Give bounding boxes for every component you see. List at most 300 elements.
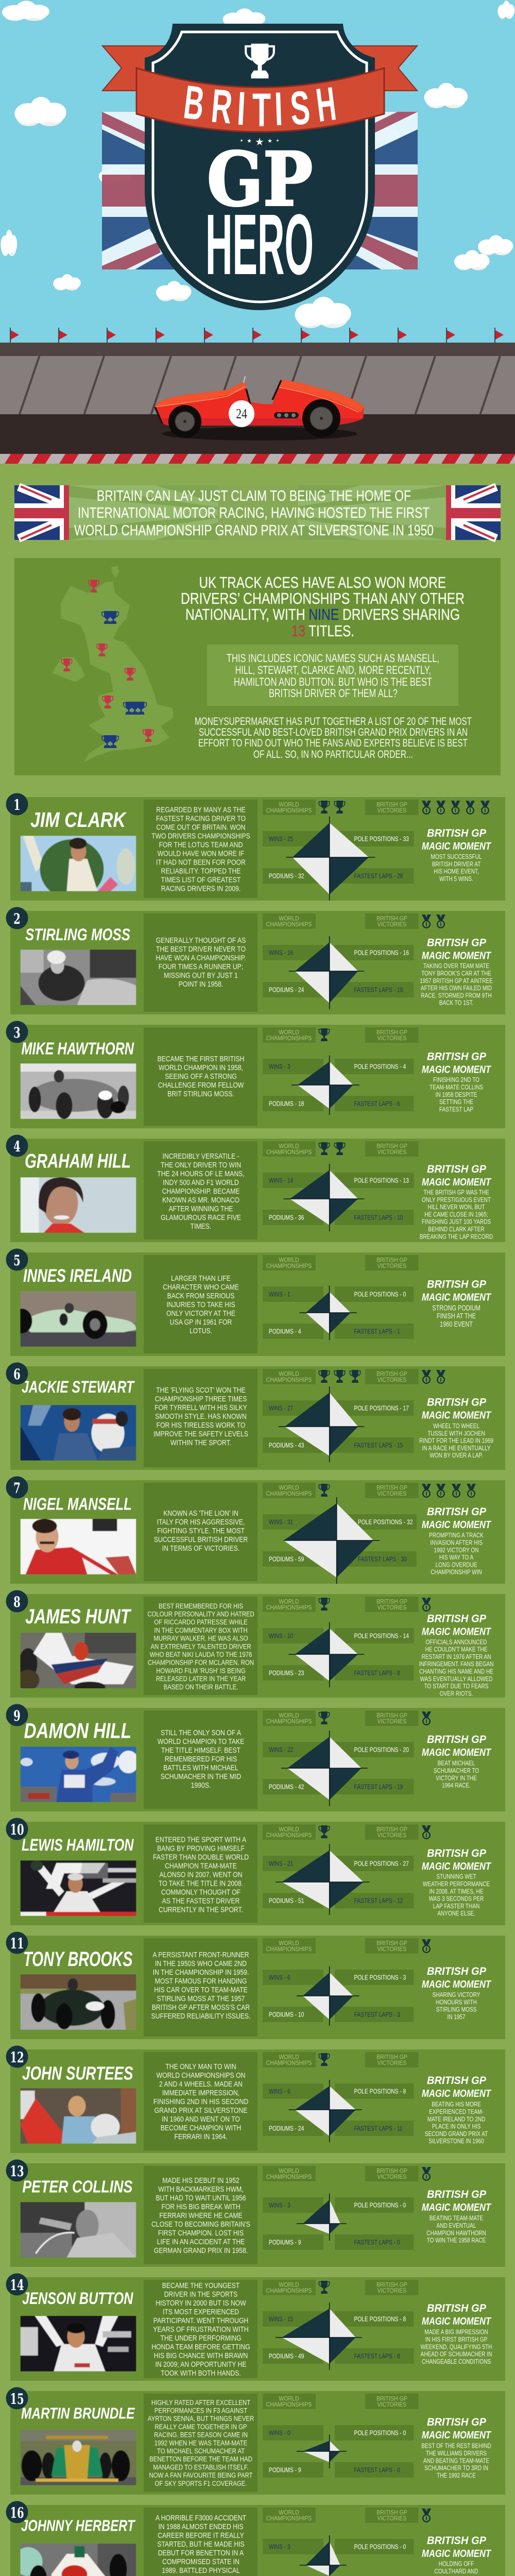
intro callout box: HAMILTON AND BUTTON. BUT WHO IS THE BEST: [234, 675, 432, 688]
panel: driver 12 John Surtees: IMMEDIATE IMPRESSION,: [162, 2089, 239, 2097]
panel: driver 1 Jim Clark: HIS HOME EVENT,: [434, 868, 479, 875]
panel: driver 8 James Hunt: 8: [13, 1593, 21, 1611]
panel: driver 11 Tony Brooks: FASTEST LAPS - 3: [354, 2012, 400, 2019]
panel: driver 11 Tony Brooks: A PERSISTANT FRONT-RUNNER: [152, 1951, 249, 1959]
panel: driver 11 Tony Brooks: POLE POSITIONS - 3: [354, 1975, 406, 1981]
panel: driver 14 Jenson Button: WEEKEND, QUALIFYING 5TH: [421, 2343, 492, 2351]
panel: driver 4 Graham Hill: CHAMPIONSHIP. BECAME: [162, 1187, 239, 1195]
panel: driver 2 Stirling Moss: WORLD: [279, 916, 299, 922]
panel: driver 11 Tony Brooks: PODIUMS - 10: [269, 2012, 304, 2019]
panel: driver 14 Jenson Button: MAGIC MOMENT: [422, 2316, 491, 2327]
panel: driver 14 Jenson Button: IN 2009; AN OPPORTUNITY HE: [155, 2360, 247, 2368]
panel: driver 6 Jackie Stewart: BRITISH GP: [427, 1396, 486, 1408]
panel: driver 14 Jenson Button: [6, 2273, 505, 2381]
panel: driver 1 Jim Clark: RACING DRIVERS IN 2009.: [161, 884, 241, 893]
panel: driver 2 Stirling Moss: WINS - 16: [269, 950, 293, 957]
panel: driver 16 Johnny Herbert: HOLDING OFF: [439, 2560, 474, 2568]
panel: driver 13 Peter Collins: BRITISH GP: [427, 2189, 486, 2200]
panel: driver 15 Martin Brundle: REALLY CAME TOGETHER IN GP: [154, 2423, 247, 2431]
panel: driver 14 Jenson Button: BECAME THE YOUNGEST: [162, 2281, 239, 2290]
panel: driver 12 John Surtees: THE ONLY MAN TO WIN: [165, 2062, 236, 2071]
panel: driver 11 Tony Brooks: SUFFERED RELIABILITY ISSUES.: [151, 2012, 250, 2020]
title: BRITISH: I: [236, 82, 247, 135]
UK map: [53, 566, 174, 762]
panel: driver 8 James Hunt: BEST REMEMBERED FOR HIS: [159, 1602, 243, 1610]
panel: driver 12 John Surtees: WORLD: [279, 2054, 299, 2061]
panel: driver 10 Lewis Hamilton: BRITISH GP: [427, 1848, 486, 1859]
panel: driver 1 Jim Clark: 1: [13, 796, 21, 814]
panel: driver 8 James Hunt: RELEASED LATER IN THE YEAR: [156, 1675, 246, 1683]
panel: driver 7 Nigel Mansell: NIGEL MANSELL: [23, 1495, 132, 1514]
panel: driver 11 Tony Brooks: STIRLING MOSS AT THE 1957: [157, 1994, 245, 2003]
panel: driver 6 Jackie Stewart: CHAMPIONSHIPS: [266, 1377, 312, 1383]
panel: driver 15 Martin Brundle: MARTIN BRUNDLE: [21, 2404, 135, 2422]
panel: driver 11 Tony Brooks: VICTORIES: [377, 1946, 407, 1953]
panel: driver 13 Peter Collins: WINS - 3: [269, 2202, 290, 2209]
shield badge: [145, 24, 375, 310]
panel: driver 7 Nigel Mansell: PROMPTING A TRACK: [429, 1532, 484, 1539]
panel: driver 1 Jim Clark: WITH 5 WINS.: [439, 875, 473, 883]
panel: driver 5 Innes Ireland: USA GP IN 1961 FOR: [170, 1318, 232, 1326]
panel: driver 9 Damon Hill: BRITISH GP: [376, 1713, 407, 1719]
panel: driver 10 Lewis Hamilton: COMMONLY THOUGHT OF: [161, 1888, 241, 1896]
panel: driver 2 Stirling Moss: POINT IN 1958.: [179, 980, 223, 988]
intro callout box: [207, 645, 458, 706]
panel: driver 13 Peter Collins: WORLD: [279, 2168, 299, 2175]
panel: driver 14 Jenson Button: MADE A BIG IMPRESSION: [424, 2328, 488, 2336]
panel: driver 10 Lewis Hamilton: STUNNING WET: [436, 1873, 476, 1880]
panel: driver 1 Jim Clark: POLE POSITIONS - 33: [354, 836, 409, 843]
panel: driver 16 Johnny Herbert: 1989. BATTLED PHYSICAL: [162, 2566, 240, 2574]
panel: driver 6 Jackie Stewart: VICTORIES: [377, 1377, 407, 1383]
panel: driver 14 Jenson Button: WINS - 15: [269, 2316, 293, 2323]
panel: driver 13 Peter Collins: [6, 2160, 505, 2267]
panel: driver 11 Tony Brooks: IN THE CHAMPIONSHIP IN 1959.: [153, 1968, 249, 1976]
panel: driver 4 Graham Hill: GRAHAM HILL: [25, 1150, 131, 1173]
panel: driver 13 Peter Collins: MAGIC MOMENT: [422, 2202, 491, 2213]
title: BRITISH: T: [252, 84, 271, 137]
panel: driver 8 James Hunt: BRITISH GP: [376, 1599, 407, 1605]
panel: driver 4 Graham Hill: FASTEST LAPS - 10: [354, 1215, 403, 1222]
panel: driver 1 Jim Clark: BRITISH GP: [427, 827, 486, 839]
panel: driver 3 Mike Hawthorn: VICTORIES: [377, 1035, 407, 1042]
panel: driver 2 Stirling Moss: TAKING OVER TEAM MATE: [423, 962, 489, 970]
panel: driver 1 Jim Clark: IT HAD NOT BEEN FOR POOR: [156, 858, 246, 867]
panel: driver 5 Innes Ireland: CHAMPIONSHIPS: [266, 1263, 312, 1269]
panel: driver 4 Graham Hill: INCREDIBLY VERSATILE -: [162, 1152, 239, 1160]
panel: driver 14 Jenson Button: THE UNDER PERFORMING: [160, 2334, 242, 2342]
text: HERO: [205, 197, 314, 293]
panel: driver 4 Graham Hill: [6, 1134, 505, 1242]
panel: driver 15 Martin Brundle: CHAMPIONSHIPS: [266, 2401, 312, 2408]
panel: driver 2 Stirling Moss: POLE POSITIONS - 16: [354, 950, 409, 957]
panel: driver 2 Stirling Moss: HAVE WON A CHAMPIONSHIP.: [156, 954, 246, 962]
panel: driver 9 Damon Hill: FASTEST LAPS - 19: [354, 1784, 403, 1791]
panel: driver 15 Martin Brundle: WINS - 0: [269, 2430, 290, 2437]
panel: driver 6 Jackie Stewart: FOR HIS TIRELESS WORK TO: [157, 1421, 245, 1429]
panel: driver 2 Stirling Moss: MISSING OUT BY JUST 1: [164, 971, 238, 979]
panel: driver 3 Mike Hawthorn: WINS - 3: [269, 1064, 290, 1071]
intro heading: 13 TITLES.: [291, 622, 354, 640]
panel: driver 10 Lewis Hamilton: CHAMPIONSHIPS: [266, 1832, 312, 1839]
panel: driver 11 Tony Brooks: CHAMPIONSHIPS: [266, 1946, 312, 1953]
panel: driver 6 Jackie Stewart: BRITISH GP: [376, 1371, 407, 1378]
panel: driver 14 Jenson Button: AHEAD OF SCHUMACHER IN: [421, 2350, 492, 2358]
panel: driver 13 Peter Collins: PETER COLLINS: [22, 2177, 132, 2197]
panel: driver 10 Lewis Hamilton: CURRENTLY IN THE SPORT.: [159, 1906, 243, 1914]
panel: driver 1 Jim Clark: VICTORIES: [377, 807, 407, 814]
panel: driver 10 Lewis Hamilton: POLE POSITIONS - 27: [354, 1861, 409, 1868]
panel: driver 10 Lewis Hamilton: TO TAKE THE TITLE IN 2008.: [159, 1879, 243, 1888]
panel: driver 5 Innes Ireland: 1960 EVENT: [440, 1319, 473, 1328]
panel: driver 8 James Hunt: CHANTING HIS NAME AND HE: [419, 1668, 493, 1675]
panel: driver 5 Innes Ireland: LOTUS.: [190, 1327, 212, 1335]
panel: driver 3 Mike Hawthorn: CHALLENGE FROM FELLOW: [158, 1081, 244, 1089]
panel: driver 7 Nigel Mansell: BRITISH GP: [427, 1506, 486, 1518]
panel: driver 8 James Hunt: CHAMPIONSHIP FOR MCLAREN. RON: [148, 1659, 254, 1667]
panel: driver 11 Tony Brooks: TONY BROOKS: [23, 1948, 133, 1971]
union flag behind the shield: [102, 112, 418, 269]
panel: driver 6 Jackie Stewart: PODIUMS - 43: [269, 1443, 304, 1449]
panel: driver 3 Mike Hawthorn: MAGIC MOMENT: [422, 1064, 491, 1075]
panel: driver 7 Nigel Mansell: 7: [13, 1479, 21, 1497]
panel: driver 15 Martin Brundle: THE 1992 RACE: [437, 2472, 476, 2479]
panel: driver 4 Graham Hill: 4: [13, 1138, 21, 1155]
panel: driver 6 Jackie Stewart: CHAMPIONSHIP THREE TIMES: [155, 1395, 247, 1403]
panel: driver 13 Peter Collins: CHAMPIONSHIPS: [266, 2174, 312, 2180]
panel: driver 12 John Surtees: BEATING HIS MORE: [432, 2100, 481, 2108]
panel: driver 1 Jim Clark: TIMES LIST OF GREATEST: [161, 875, 241, 884]
panel: driver 12 John Surtees: MATE IRELAND TO 2ND: [427, 2115, 485, 2123]
panel: driver 13 Peter Collins: FIRST CHAMPION. LOST HIS: [158, 2229, 244, 2237]
panel: driver 16 Johnny Herbert: BRITISH GP: [427, 2535, 486, 2547]
panel: driver 4 Graham Hill: POLE POSITIONS - 13: [354, 1178, 409, 1184]
panel: driver 9 Damon Hill: CHAMPIONSHIPS: [266, 1718, 312, 1725]
panel: driver 5 Innes Ireland: [6, 1249, 505, 1356]
panel: driver 3 Mike Hawthorn: POLE POSITIONS - 4: [354, 1064, 406, 1071]
panel: driver 12 John Surtees: MAGIC MOMENT: [422, 2088, 491, 2099]
panel: driver 6 Jackie Stewart: WHEEL TO WHEEL: [433, 1422, 479, 1430]
panel: driver 16 Johnny Herbert: 16: [10, 2504, 24, 2521]
panel: driver 5 Innes Ireland: BRITISH GP: [376, 1257, 407, 1264]
panel: driver 13 Peter Collins: TO WIN THE 1958 RACE: [427, 2236, 486, 2244]
panel: driver 10 Lewis Hamilton: LEWIS HAMILTON: [22, 1836, 134, 1854]
panel: driver 7 Nigel Mansell: WORLD: [279, 1485, 299, 1492]
panel: driver 9 Damon Hill: SCHUMACHER IN THE MID: [161, 1772, 241, 1781]
panel: driver 9 Damon Hill: POLE POSITIONS - 20: [354, 1747, 409, 1754]
panel: driver 11 Tony Brooks: BRITISH GP: [376, 1940, 407, 1947]
panel: driver 14 Jenson Button: TOOK WITH BOTH HANDS.: [161, 2369, 241, 2377]
panel: driver 9 Damon Hill: 1994 RACE.: [442, 1782, 471, 1789]
panel: driver 1 Jim Clark: RELIABILITY. TOPPED THE: [161, 867, 241, 875]
panel: driver 13 Peter Collins: FOR HIS BIG BREAK WITH: [161, 2202, 241, 2211]
panel: driver 14 Jenson Button: CHAMPIONSHIPS: [266, 2287, 312, 2294]
panel: driver 11 Tony Brooks: BRITISH GP AFTER MOSS'S CAR: [152, 2003, 250, 2011]
panel: driver 16 Johnny Herbert: DEBUT FOR BENETTON IN A: [158, 2549, 244, 2557]
panel: driver 6 Jackie Stewart: MAGIC MOMENT: [422, 1410, 491, 1421]
panel: driver 8 James Hunt: PODIUMS - 23: [269, 1670, 304, 1677]
panel: driver 11 Tony Brooks: HONOURS WITH: [436, 1998, 477, 2006]
panel: driver 3 Mike Hawthorn: FASTEST LAPS - 6: [354, 1101, 400, 1108]
panel: driver 2 Stirling Moss: BRITISH GP: [376, 916, 407, 922]
race car: [155, 376, 364, 440]
panel: driver 11 Tony Brooks: MOST FAMOUS FOR HANDING: [155, 1977, 247, 1985]
panel: driver 5 Innes Ireland: CHARACTER WHO CAME: [163, 1283, 239, 1291]
panel: driver 14 Jenson Button: FASTEST LAPS - 8: [354, 2353, 400, 2360]
panel: driver 13 Peter Collins: FERRARI WHERE HE CAME: [159, 2211, 243, 2219]
panel: driver 15 Martin Brundle: AND BEATING TEAM-MATE: [423, 2457, 489, 2465]
panel: driver 10 Lewis Hamilton: CHAMPION TEAM-MATE: [165, 1862, 237, 1870]
panel: driver 9 Damon Hill: WORLD CHAMPION TO TAKE: [158, 1737, 244, 1745]
panel: driver 2 Stirling Moss: 2: [13, 910, 21, 927]
panel: driver 14 Jenson Button: PODIUMS - 49: [269, 2353, 304, 2360]
panel: driver 4 Graham Hill: TIMES.: [191, 1222, 211, 1230]
panel: driver 6 Jackie Stewart: 6: [13, 1365, 21, 1383]
panel: driver 7 Nigel Mansell: [6, 1477, 505, 1584]
panel: driver 11 Tony Brooks: BRITISH GP: [427, 1965, 486, 1977]
panel: driver 2 Stirling Moss: 1957 BRITISH GP AT AINTREE: [420, 977, 493, 985]
panel: driver 4 Graham Hill: MAGIC MOMENT: [422, 1177, 491, 1188]
panel: driver 13 Peter Collins: POLE POSITIONS - 0: [354, 2202, 406, 2209]
panel: driver 15 Martin Brundle: HIGHLY RATED AFTER EXCELLENT: [151, 2399, 250, 2406]
panel: driver 16 Johnny Herbert: COULTHARD AND: [434, 2568, 478, 2575]
panel: driver 14 Jenson Button: BRITISH GP: [376, 2282, 407, 2289]
panel: driver 15 Martin Brundle: SCHUMACHER TO 3RD IN: [424, 2464, 488, 2472]
panel: driver 7 Nigel Mansell: MAGIC MOMENT: [422, 1519, 491, 1531]
title: BRITISH: H: [313, 77, 339, 132]
panel: driver 6 Jackie Stewart: RINDT FOR THE LEAD IN 1969: [419, 1437, 493, 1445]
panel: driver 6 Jackie Stewart: WON BY OVER A LAP.: [430, 1452, 483, 1460]
panel: driver 4 Graham Hill: KNOWN AS MR. MONACO: [162, 1196, 239, 1204]
intro heading: UK TRACK ACES HAVE ALSO WON MORE: [199, 573, 446, 591]
panel: driver 5 Innes Ireland: PODIUMS - 4: [269, 1329, 301, 1335]
panel: driver 2 Stirling Moss: VICTORIES: [377, 921, 407, 928]
panel: driver 1 Jim Clark: REGARDED BY MANY AS THE: [156, 805, 246, 814]
panel: driver 4 Graham Hill: GLAMOUROUS RACE FIVE: [161, 1213, 241, 1222]
panel: driver 4 Graham Hill: AFTER WINNING THE: [168, 1205, 233, 1213]
panel: driver 8 James Hunt: AN EXTREMELY TALENTED DRIVER: [150, 1642, 251, 1651]
panel: driver 4 Graham Hill: CHAMPIONSHIPS: [266, 1149, 312, 1156]
panel: driver 14 Jenson Button: YEARS OF FRUSTRATION WITH: [153, 2325, 249, 2333]
panel: driver 4 Graham Hill: THE BRITISH GP WAS THE: [423, 1189, 489, 1196]
panel: driver 3 Mike Hawthorn: WORLD CHAMPION IN 1958,: [159, 1063, 243, 1072]
panel: driver 2 Stirling Moss: MAGIC MOMENT: [422, 950, 491, 961]
panel: driver 6 Jackie Stewart: WINS - 27: [269, 1405, 293, 1412]
panel: driver 5 Innes Ireland: FASTEST LAPS - 1: [354, 1329, 400, 1335]
panel: driver 8 James Hunt: [6, 1590, 505, 1698]
panel: driver 12 John Surtees: SILVERSTONE IN 1960: [428, 2138, 484, 2145]
panel: driver 3 Mike Hawthorn: BRIT STIRLING MOSS.: [167, 1090, 234, 1098]
panel: driver 15 Martin Brundle: AYRTON SENNA, BUT THINGS NEVER: [148, 2415, 254, 2422]
panel: driver 14 Jenson Button: WORLD: [279, 2282, 299, 2289]
panel: driver 16 Johnny Herbert: A HORRIBLE F3000 ACCIDENT: [156, 2514, 246, 2522]
panel: driver 6 Jackie Stewart: SMOOTH STYLE. HAS KNOWN: [155, 1412, 247, 1420]
panel: driver 2 Stirling Moss: BRITISH GP: [427, 937, 486, 949]
panel: driver 15 Martin Brundle: [6, 2387, 505, 2495]
panel: driver 8 James Hunt: BASED ON THEIR BATTLE.: [164, 1683, 238, 1691]
panel: driver 4 Graham Hill: FINISHING JUST 100 YARDS: [422, 1218, 491, 1226]
panel: driver 10 Lewis Hamilton: BANG BY PROVING HIMSELF: [157, 1844, 245, 1853]
panel: driver 9 Damon Hill: [6, 1704, 505, 1811]
panel: driver 5 Innes Ireland: STRONG PODIUM: [432, 1303, 480, 1312]
panel: driver 7 Nigel Mansell: FIGHTING STYLE. THE MOST: [157, 1527, 245, 1535]
panel: driver 14 Jenson Button: HIS BIG CHANCE WITH BRAWN: [154, 2351, 248, 2360]
panel: driver 4 Graham Hill: BREAKING THE LAP RECORD: [420, 1233, 493, 1241]
map trophies: [61, 580, 153, 748]
panel: driver 14 Jenson Button: ITS MOST EXPERIENCED: [163, 2308, 239, 2316]
panel: driver 16 Johnny Herbert: MAGIC MOMENT: [422, 2548, 491, 2560]
ribbon front: [136, 68, 384, 132]
panel: driver 12 John Surtees: WORLD CHAMPIONSHIPS ON: [157, 2071, 245, 2079]
panel: driver 2 Stirling Moss: THE BEST DRIVER NEVER TO: [156, 945, 246, 953]
panel: driver 4 Graham Hill: HE CAME CLOSE IN 1965;: [424, 1211, 488, 1218]
panel: driver 12 John Surtees: FINISHING 2ND IN HIS SECOND: [153, 2097, 248, 2106]
race car: 24: [236, 406, 247, 422]
sky: [0, 0, 515, 343]
panel: driver 3 Mike Hawthorn: PODIUMS - 18: [269, 1101, 304, 1108]
panel: driver 12 John Surtees: BRITISH GP: [427, 2075, 486, 2087]
panel: driver 15 Martin Brundle: WORLD: [279, 2396, 299, 2402]
panel: driver 9 Damon Hill: WORLD: [279, 1713, 299, 1719]
panel: driver 12 John Surtees: PODIUMS - 24: [269, 2126, 304, 2132]
panel: driver 9 Damon Hill: THE TITLE HIMSELF. BEST: [161, 1746, 241, 1754]
panel: driver 7 Nigel Mansell: FASTEST LAPS - 30: [358, 1556, 407, 1563]
panel: driver 8 James Hunt: OF RICCARDO PATRESSE WHILE: [154, 1618, 248, 1626]
panel: driver 12 John Surtees: EXPERIENCED TEAM-: [429, 2108, 484, 2115]
panel: driver 13 Peter Collins: AND EVENTUAL: [437, 2222, 476, 2229]
panel: driver 15 Martin Brundle: TO MICHAEL SCHUMACHER AT: [157, 2447, 245, 2455]
panel: driver 5 Innes Ireland: ONLY VICTORY AT THE: [166, 1309, 235, 1317]
panel: driver 1 Jim Clark: BRITISH GP: [376, 802, 407, 808]
panel: driver 7 Nigel Mansell: INVASION AFTER HIS: [430, 1539, 483, 1547]
panel: driver 3 Mike Hawthorn: CHAMPIONSHIPS: [266, 1035, 312, 1042]
panel: driver 16 Johnny Herbert: JOHNNY HERBERT: [21, 2517, 136, 2535]
panel: intro: [14, 558, 501, 775]
panel: driver 5 Innes Ireland: FINISH AT THE: [437, 1312, 476, 1320]
panel: driver 12 John Surtees: WINS - 6: [269, 2089, 290, 2095]
panel: driver 3 Mike Hawthorn: SETTING THE: [439, 1098, 473, 1106]
panel: driver 1 Jim Clark: PODIUMS - 32: [269, 873, 304, 880]
intro callout box: THIS INCLUDES ICONIC NAMES SUCH AS MANSELL,: [227, 652, 439, 665]
panel: driver 15 Martin Brundle: MAGIC MOMENT: [422, 2430, 491, 2441]
panel: driver 2 Stirling Moss: FOUR TIMES A RUNNER UP;: [159, 962, 243, 971]
panel: driver 12 John Surtees: FERRARI IN 1964.: [174, 2132, 228, 2141]
panel: driver 15 Martin Brundle: PERFORMANCES IN F3 AGAINST: [154, 2407, 247, 2415]
stars: ★: [240, 139, 243, 143]
panel: driver 3 Mike Hawthorn: SEEING OFF A STRONG: [165, 1072, 237, 1080]
panel: driver 2 Stirling Moss: RACE. STORMED FROM 9TH: [421, 992, 492, 999]
panel: driver 9 Damon Hill: MAGIC MOMENT: [422, 1747, 491, 1758]
title: BRITISH: B: [181, 75, 207, 130]
panel: driver 13 Peter Collins: VICTORIES: [377, 2174, 407, 2180]
panel: driver 5 Innes Ireland: INJURIES TO TAKE HIS: [166, 1300, 235, 1309]
panel: driver 2 Stirling Moss: FASTEST LAPS - 19: [354, 987, 403, 994]
panel: driver 16 Johnny Herbert: COMPROMISED STATE IN: [162, 2557, 239, 2566]
panel: driver 14 Jenson Button: BRITISH GP: [427, 2302, 486, 2314]
panel: driver 12 John Surtees: JOHN SURTEES: [22, 2063, 133, 2083]
panel: driver 13 Peter Collins: CLOSE TO BECOMING BRITAIN'S: [151, 2220, 250, 2228]
panel: driver 8 James Hunt: HOWARD FILM 'RUSH' IS BEING: [156, 1667, 246, 1675]
panel: driver 5 Innes Ireland: 5: [13, 1251, 21, 1269]
intro callout box: BRITISH DRIVER OF THEM ALL?: [269, 687, 398, 700]
panel: driver 4 Graham Hill: BRITISH GP: [427, 1163, 486, 1175]
panel: driver 16 Johnny Herbert: WINS - 3: [269, 2544, 290, 2551]
panel: driver 11 Tony Brooks: IN THE 1950S WHO CAME 2ND: [155, 1959, 247, 1968]
panel: driver 16 Johnny Herbert: CHAMPIONSHIPS: [266, 2515, 312, 2522]
panel: driver 10 Lewis Hamilton: AS THE FASTEST DRIVER: [162, 1897, 240, 1905]
panel: driver 4 Graham Hill: WORLD: [279, 1143, 299, 1150]
panel: driver 9 Damon Hill: STILL THE ONLY SON OF A: [161, 1728, 241, 1737]
panel: driver 11 Tony Brooks: WINS - 6: [269, 1975, 290, 1981]
panel: driver 13 Peter Collins: WITH BACKMARKERS HWM,: [158, 2185, 244, 2193]
panel: driver 12 John Surtees: [6, 2045, 505, 2153]
panel: driver 8 James Hunt: WHO BEAT NIKI LAUDA TO THE 1976: [150, 1651, 252, 1658]
panel: driver 7 Nigel Mansell: SUCCESSFUL BRITISH DRIVER: [154, 1535, 248, 1544]
panel: driver 1 Jim Clark: TWO DRIVERS CHAMPIONSHIPS: [151, 832, 250, 840]
panel: driver 15 Martin Brundle: MANAGED TO ESTABLISH ITSELF.: [153, 2463, 249, 2471]
panel: driver 10 Lewis Hamilton: WORLD: [279, 1826, 299, 1833]
panel: driver 13 Peter Collins: BUT HAD TO WAIT UNTIL 1956: [156, 2194, 246, 2202]
panel: driver 5 Innes Ireland: WINS - 1: [269, 1292, 290, 1298]
panel: driver 4 Graham Hill: THE ONLY DRIVER TO WIN: [161, 1161, 241, 1169]
panel: driver 5 Innes Ireland: MAGIC MOMENT: [422, 1292, 491, 1303]
panel: driver 8 James Hunt: TO START DUE TO FEARS: [424, 1683, 489, 1690]
panel: driver 9 Damon Hill: REMEMBERED FOR HIS: [165, 1755, 237, 1763]
panel: driver 3 Mike Hawthorn: BRITISH GP: [376, 1029, 407, 1036]
panel: driver 10 Lewis Hamilton: FASTER THAN DOUBLE WORLD: [153, 1853, 249, 1861]
panel: driver 16 Johnny Herbert: CAREER BEFORE IT REALLY: [158, 2531, 244, 2539]
panel: driver 4 Graham Hill: BRITISH GP: [376, 1143, 407, 1150]
panel: driver 13 Peter Collins: PODIUMS - 9: [269, 2240, 301, 2246]
panel: driver 8 James Hunt: MURRAY WALKER. HE WAS ALSO: [153, 1635, 248, 1642]
panel: driver 8 James Hunt: WAS EVENTUALLY ALLOWED: [420, 1675, 492, 1683]
panel: driver 9 Damon Hill: SCHUMACHER TO: [434, 1767, 479, 1774]
panel: driver 14 Jenson Button: POLE POSITIONS - 8: [354, 2316, 406, 2323]
panel: driver 5 Innes Ireland: BACK FROM SERIOUS: [167, 1292, 234, 1300]
panel: driver 16 Johnny Herbert: WORLD: [279, 2510, 299, 2516]
panel: driver 1 Jim Clark: JIM CLARK: [30, 808, 127, 832]
panel: driver 5 Innes Ireland: WORLD: [279, 1257, 299, 1264]
panel: driver 1 Jim Clark: COME OUT OF BRITAIN. WON: [157, 823, 245, 832]
panel: driver 9 Damon Hill: 9: [13, 1707, 21, 1724]
panel: driver 10 Lewis Hamilton: WAS 3 SECONDS PER: [429, 1895, 484, 1903]
panel: driver 8 James Hunt: OFFICIALS ANNOUNCED: [426, 1638, 487, 1646]
panel: driver 8 James Hunt: BRITISH GP: [427, 1613, 486, 1625]
panel: driver 15 Martin Brundle: THE WILLIAMS DRIVERS: [426, 2450, 487, 2457]
panel: driver 7 Nigel Mansell: 1992 VICTORY ON: [434, 1547, 478, 1554]
panel: driver 10 Lewis Hamilton: FASTEST LAPS - 12: [354, 1898, 403, 1905]
race track: [0, 343, 515, 464]
panel: driver 8 James Hunt: CHAMPIONSHIPS: [266, 1604, 312, 1611]
panel: driver 3 Mike Hawthorn: [6, 1021, 505, 1128]
panel: driver 3 Mike Hawthorn: WORLD: [279, 1029, 299, 1036]
stars: ★: [267, 138, 272, 144]
panel: driver 3 Mike Hawthorn: IN 1958 DESPITE: [436, 1091, 477, 1098]
panel: driver 2 Stirling Moss: [6, 907, 505, 1014]
panel: driver 15 Martin Brundle: 15: [10, 2390, 24, 2408]
panel: driver 8 James Hunt: OVER RIOTS.: [440, 1690, 473, 1698]
panel: driver 2 Stirling Moss: CHAMPIONSHIPS: [266, 921, 312, 928]
panel: driver 4 Graham Hill: VICTORIES: [377, 1149, 407, 1156]
panel: driver 8 James Hunt: INFRINGEMENT. FANS BEGAN: [419, 1660, 493, 1668]
panel: driver 1 Jim Clark: WINS - 25: [269, 836, 293, 843]
panel: driver 11 Tony Brooks: 11: [10, 1935, 24, 1952]
panel: driver 13 Peter Collins: 13: [10, 2162, 24, 2180]
panel: driver 9 Damon Hill: BEAT MICHAEL: [438, 1759, 475, 1767]
panel: driver 9 Damon Hill: 1990S.: [191, 1781, 211, 1789]
panel: driver 1 Jim Clark: FASTEST LAPS - 28: [354, 873, 403, 880]
title: BRITISH: S: [288, 81, 312, 135]
